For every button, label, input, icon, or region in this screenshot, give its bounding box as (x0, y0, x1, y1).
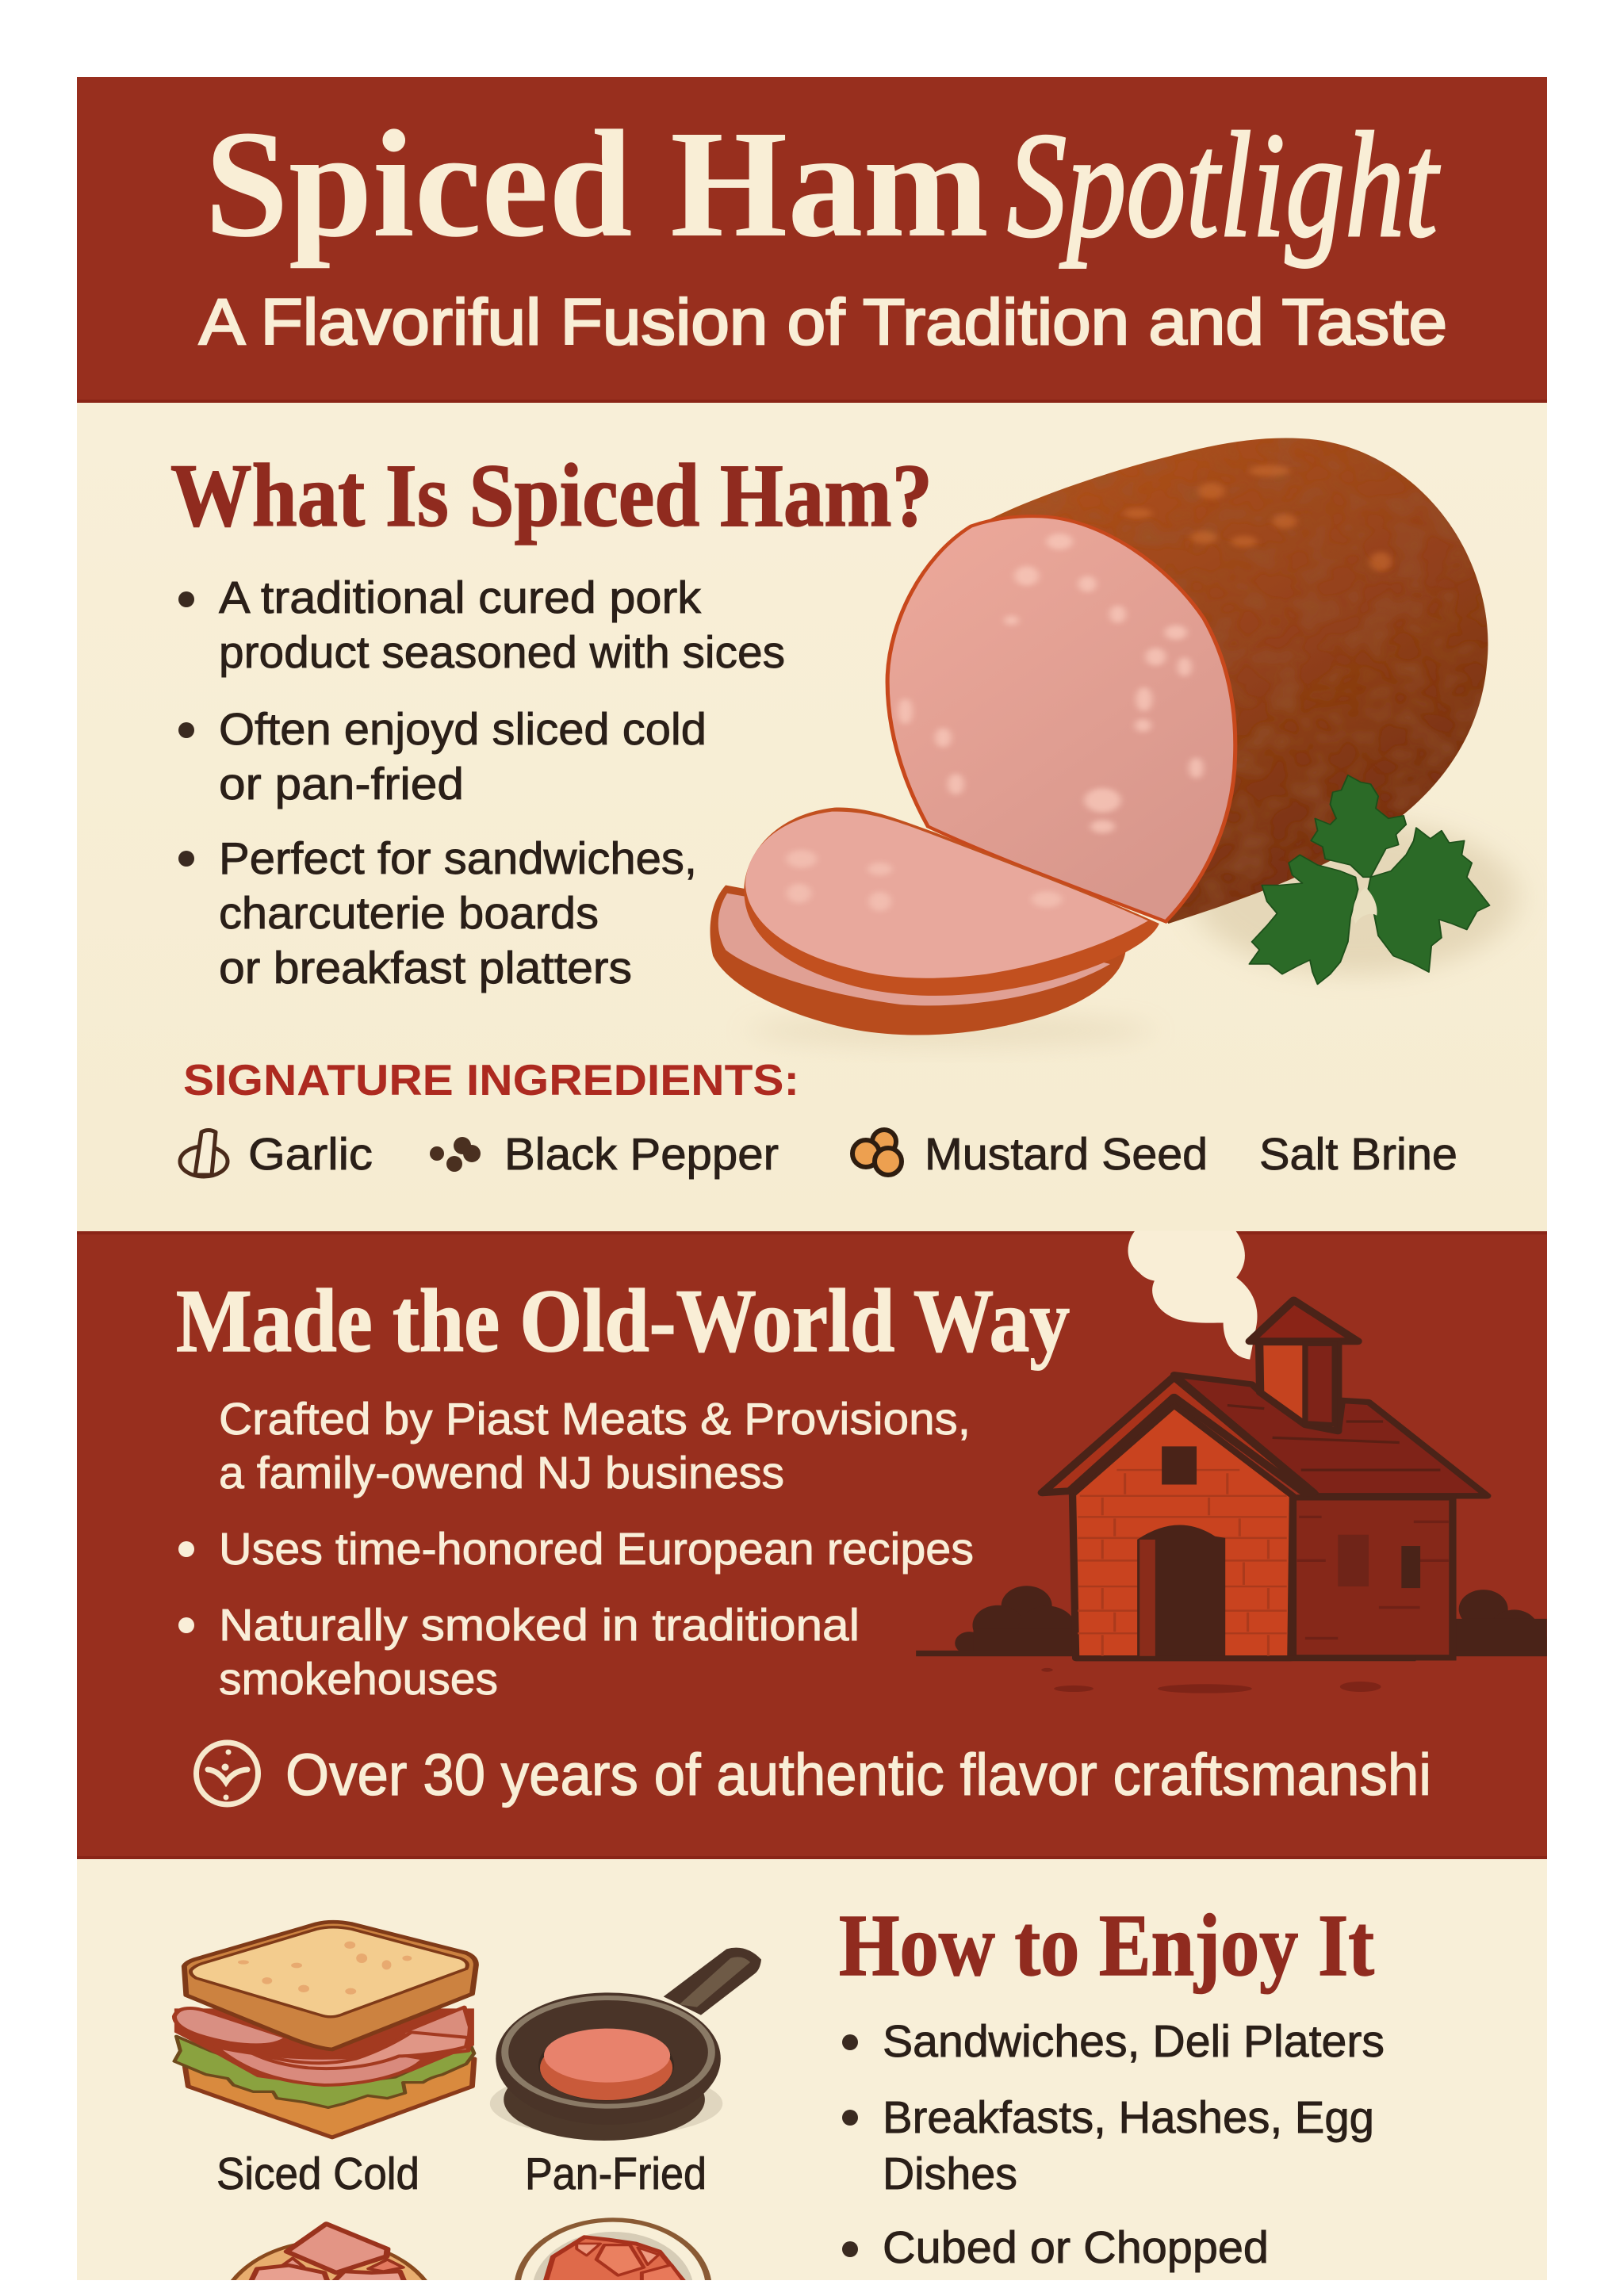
roof shingle lines (1228, 1406, 1440, 1470)
bullet list: craft: smokehouses (219, 1654, 498, 1705)
bullet list: craft: Uses time-honored European recipes (219, 1524, 974, 1575)
bushes (916, 1586, 1547, 1656)
bullet list: description (178, 572, 785, 993)
label: sliced cold: Siced Cold (216, 2149, 419, 2199)
panel: title banner (77, 77, 1547, 403)
icon: frying pan (490, 1948, 761, 2141)
illustration: spiced ham with slices and parsley (710, 438, 1518, 1047)
window (1162, 1446, 1197, 1485)
illustration: smokehouse (916, 1230, 1547, 1693)
side wall (1293, 1498, 1453, 1658)
side roof (1174, 1375, 1488, 1496)
ingredient: salt brine: Salt Brine (1259, 1129, 1457, 1180)
label: pan-fried: Pan-Fried (525, 2149, 707, 2199)
panel: made the old-world way (77, 1230, 1547, 1859)
bullet list: description: charcuterie boards (219, 888, 599, 939)
heading: how to enjoy it: How to Enjoy It (839, 1897, 1374, 1995)
ingredient: black pepper: Black Pepper (504, 1129, 779, 1180)
smoke plume (1128, 1230, 1257, 1360)
bullet list: description: or breakfast platters (219, 943, 632, 993)
subtitle: A Flavoriful Fusion of Tradition and Taste (199, 286, 1447, 358)
panel: how to enjoy it (77, 1859, 1547, 2296)
front wall (1073, 1406, 1293, 1659)
heading: what is spiced ham: What Is Spiced Ham? (170, 446, 933, 545)
ingredient: mustard seed: Mustard Seed (925, 1129, 1208, 1180)
bullet list: serving ideas (842, 2016, 1385, 2273)
icon: clock (197, 1743, 259, 1804)
heading: made the old-world way: Made the Old-World Way (176, 1272, 1070, 1371)
bullet list: description: Often enjoyd sliced cold (219, 704, 707, 755)
chimney cap (1250, 1300, 1358, 1341)
shadows on ground (1041, 1668, 1381, 1693)
bullet list: serving ideas: Cubed or Chopped (883, 2222, 1269, 2273)
icon: sandwich (174, 1922, 476, 2137)
bullet list: description: Perfect for sandwiches, (219, 833, 697, 884)
heading: signature ingredients: SIGNATURE INGREDIENTS: (183, 1055, 799, 1104)
bullet list: craft: Naturally smoked in traditional (219, 1600, 860, 1651)
ingredient: garlic: Garlic (248, 1129, 373, 1180)
bullet list: description: product seasoned with sices (219, 627, 785, 678)
icon: cubed ham plate (231, 2221, 427, 2280)
bullet list: craft: Crafted by Piast Meats & Provisions, (219, 1394, 971, 1445)
chimney (1259, 1342, 1338, 1431)
bullet list: serving ideas: Sandwiches, Deli Platers (883, 2016, 1385, 2067)
callout: over 30 years: Over 30 years of authentic flavor craftsmanshi (285, 1742, 1431, 1808)
bullet list: craft: a family-owend NJ business (219, 1448, 784, 1498)
icon: chopped ham bowl (515, 2218, 711, 2280)
parsley sprig (1249, 775, 1489, 984)
bullet list: description: or pan-fried (219, 759, 464, 809)
bullet list: description: A traditional cured pork (219, 572, 702, 623)
brick lines (1078, 1470, 1287, 1656)
title accent: Spotlight (1007, 102, 1440, 269)
door (1137, 1525, 1225, 1659)
bullet list: craft (178, 1394, 974, 1705)
title: Spiced Ham (205, 98, 989, 269)
panel: what is spiced ham (77, 403, 1547, 1231)
ingredient: garlic (180, 1129, 373, 1180)
bullet list: serving ideas: Dishes (883, 2149, 1017, 2199)
gable trim (1042, 1377, 1313, 1494)
bullet list: serving ideas: Breakfasts, Hashes, Egg (883, 2092, 1374, 2143)
